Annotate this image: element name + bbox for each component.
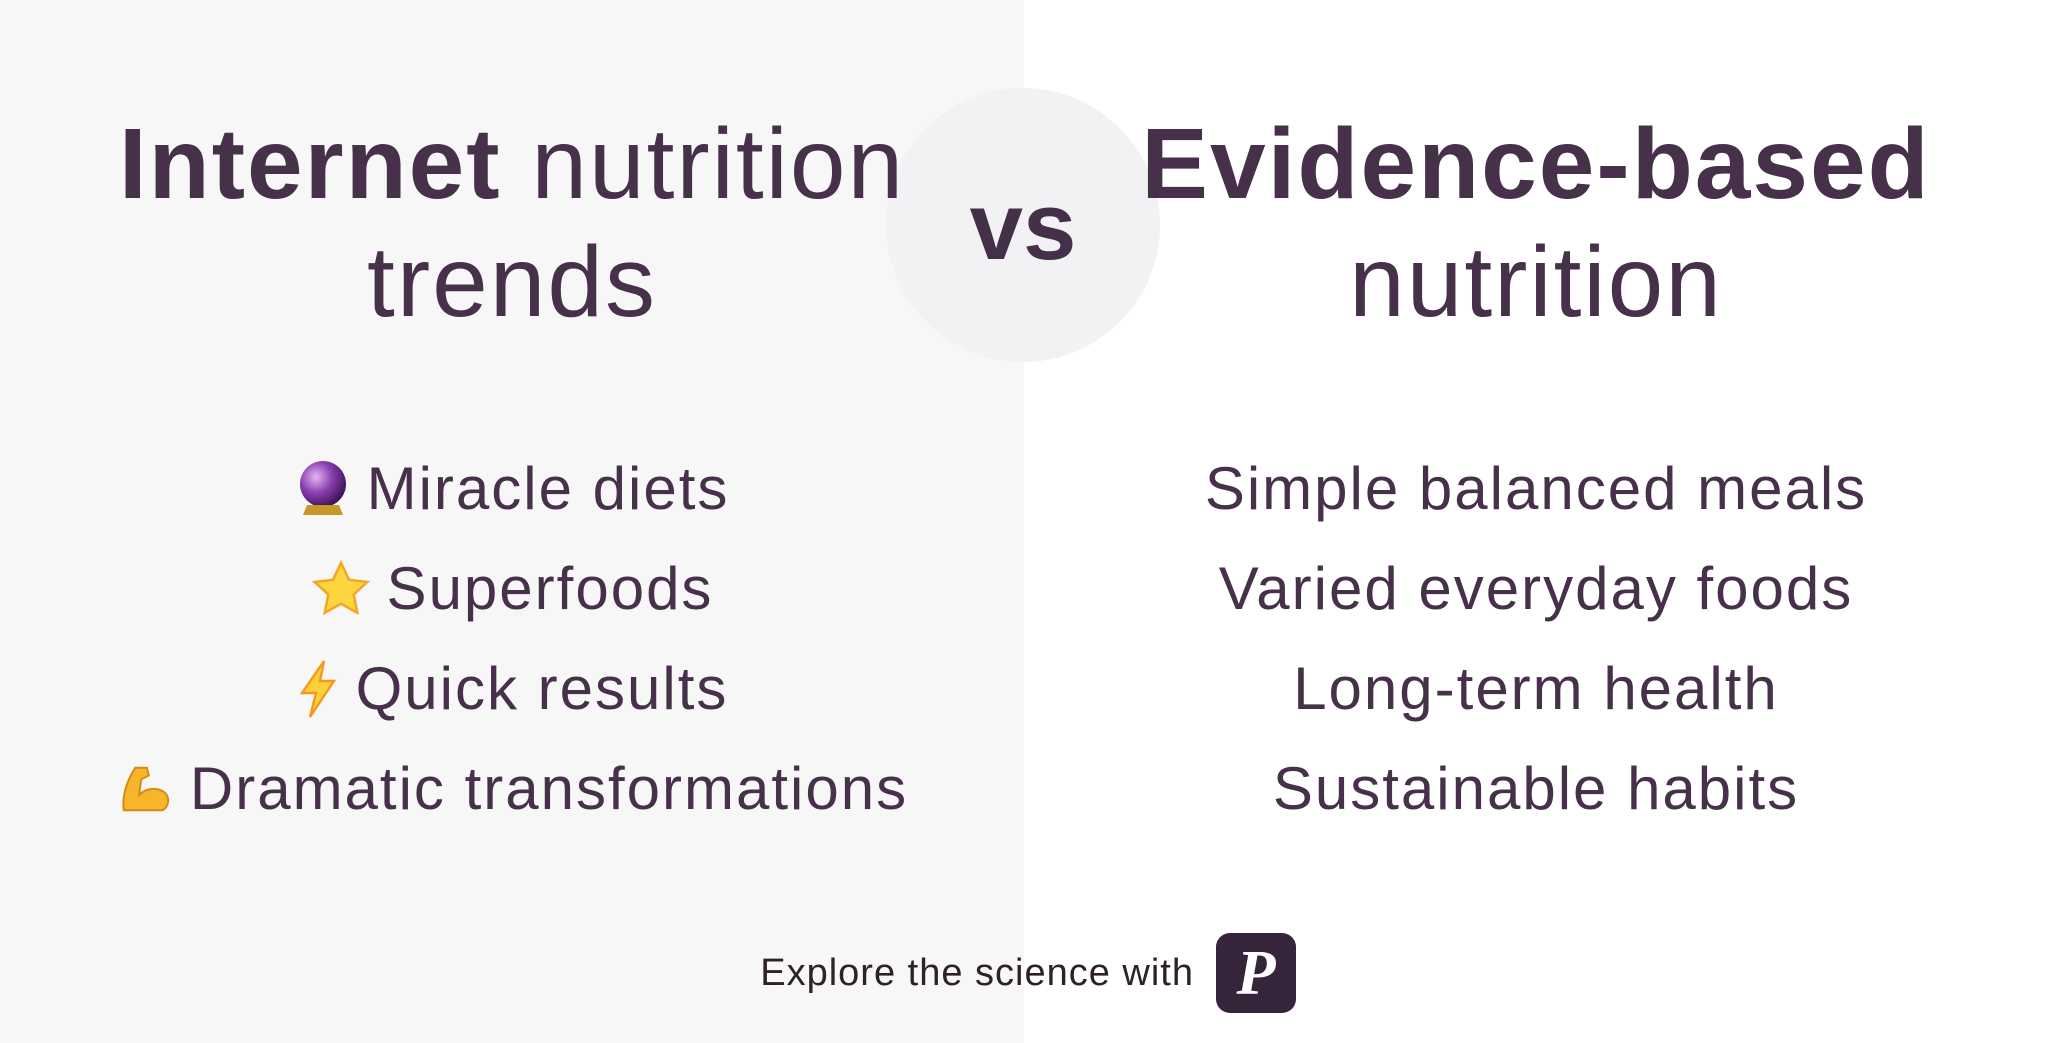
title: right xyxy=(1141,108,1931,338)
panel: left background xyxy=(0,0,1024,1043)
footer text: Explore the science with xyxy=(760,952,1194,994)
icon: logo P: P xyxy=(1236,937,1276,1008)
vs label: vs xyxy=(970,173,1076,280)
item: long-term health: Long-term health xyxy=(1293,655,1779,722)
item: dramatic transformations: Dramatic transformations xyxy=(190,755,908,822)
title: left xyxy=(119,108,905,338)
list: evidence-based xyxy=(1205,455,1867,822)
item: miracle diets: Miracle diets xyxy=(367,455,729,522)
title: right: nutrition xyxy=(1349,226,1723,338)
vs circle xyxy=(886,88,1160,362)
item: sustainable habits: Sustainable habits xyxy=(1273,755,1799,822)
item: quick results: Quick results xyxy=(356,655,728,722)
item: superfoods: Superfoods xyxy=(387,555,713,622)
title: left: trends xyxy=(367,226,657,338)
item: varied everyday foods: Varied everyday foods xyxy=(1219,555,1853,622)
title: right: Evidence-based xyxy=(1141,108,1931,220)
title: left: Internet nutrition xyxy=(119,108,905,220)
list: internet trends xyxy=(122,455,908,822)
item: simple balanced meals: Simple balanced meals xyxy=(1205,455,1867,522)
icon: logo P xyxy=(1216,933,1296,1013)
